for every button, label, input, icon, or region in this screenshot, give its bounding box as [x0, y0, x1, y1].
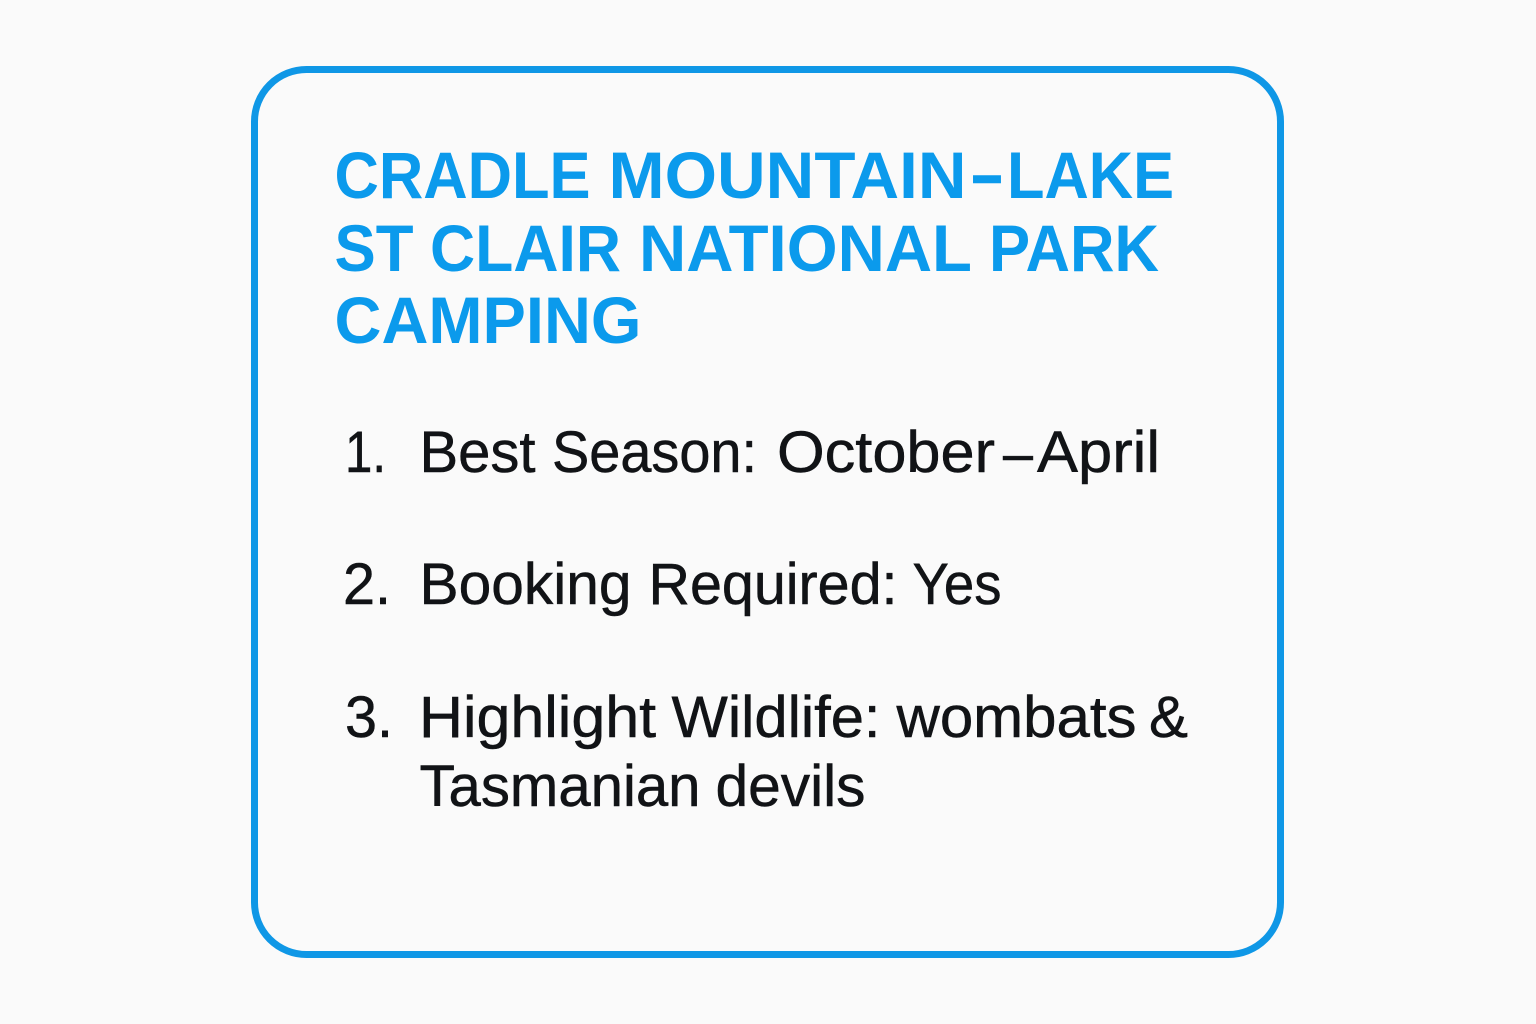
title	[334, 137, 1174, 357]
list item 2: booking required: 2.	[343, 552, 391, 617]
list item 3: highlight wildlife: 3.	[345, 685, 393, 750]
list item 1: best season: Season:	[552, 420, 757, 485]
title: PARK	[989, 211, 1159, 285]
list item 2: booking required: Required:	[648, 552, 898, 617]
title: NATIONAL	[639, 211, 972, 285]
list item 2: booking required: Booking	[420, 552, 632, 617]
list item 1: best season: October	[777, 420, 995, 485]
list item 2: booking required: Yes	[912, 552, 1002, 617]
title: CLAIR	[430, 211, 621, 285]
list item 1: best season: April	[1037, 420, 1160, 485]
list item 3: highlight wildlife	[345, 685, 1188, 819]
title: LAKE	[1007, 138, 1174, 212]
title: CAMPING	[334, 283, 642, 357]
list item 3: highlight wildlife: Highlight	[419, 685, 656, 750]
list item 3: highlight wildlife: Wildlife:	[672, 685, 880, 750]
title: –	[972, 137, 1002, 211]
list item 3: highlight wildlife: devils	[716, 754, 866, 819]
list item 1: best season: Best	[420, 420, 536, 485]
panel: camping card	[254, 70, 1280, 954]
title: CRADLE	[334, 138, 590, 212]
list item 1: best season: –	[1003, 421, 1034, 486]
list item 1: best season: 1.	[345, 420, 386, 485]
list item 3: highlight wildlife: &	[1149, 685, 1188, 750]
title: ST	[334, 211, 414, 285]
list item 3: highlight wildlife: Tasmanian	[420, 754, 700, 819]
list item 2: booking required	[343, 552, 1002, 617]
list item 3: highlight wildlife: wombats	[895, 685, 1136, 750]
list item 1: best season	[345, 420, 1160, 486]
title: MOUNTAIN	[608, 138, 966, 212]
